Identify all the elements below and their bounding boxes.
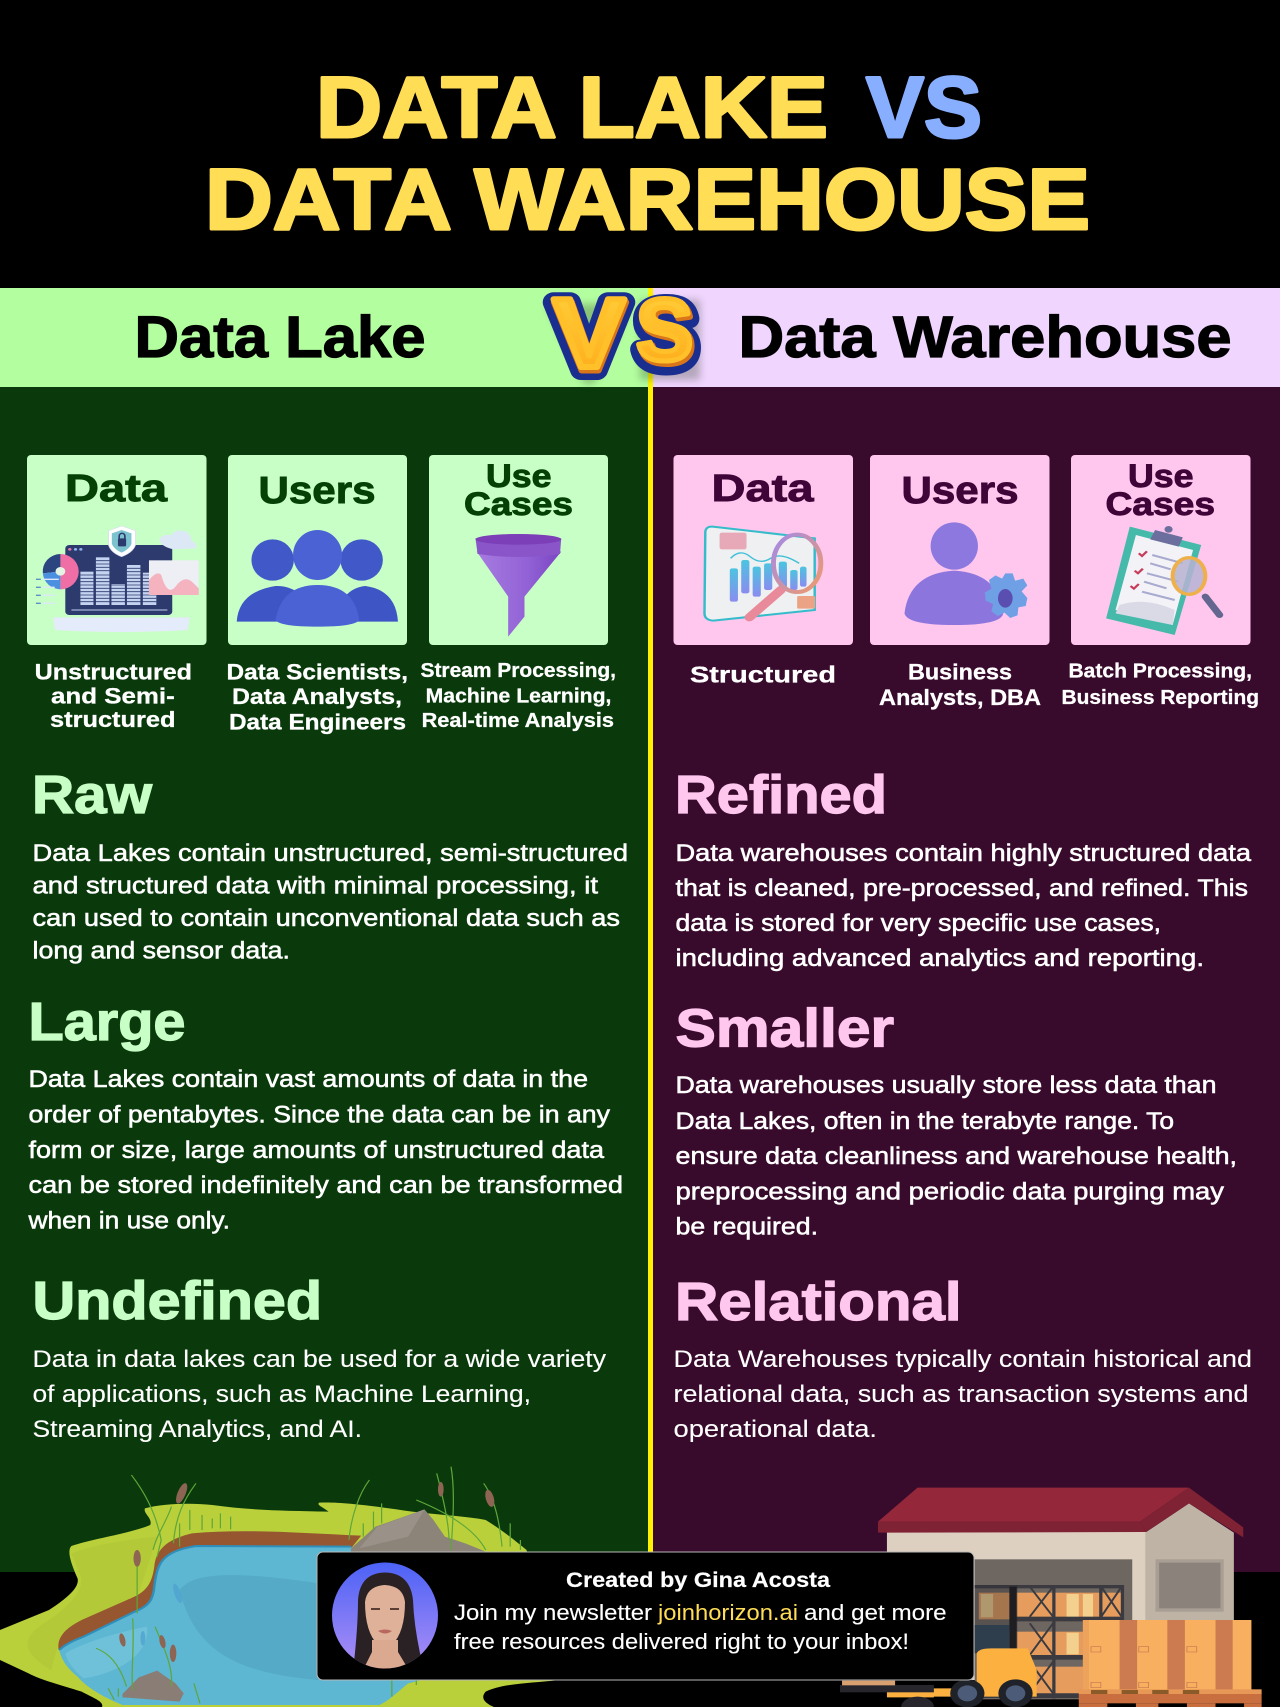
footer card: creator credit: [317, 1552, 974, 1680]
card: Use Cases: Cases: [1106, 486, 1215, 522]
title: DATA WAREHOUSE: [205, 152, 1090, 248]
icon: chart under magnifier: [704, 527, 821, 621]
title: VS: [866, 60, 982, 156]
section: Raw: long and sensor data.: [32, 938, 290, 965]
section: Large: Data Lakes contain vast amounts of data in the: [28, 1066, 588, 1093]
section: Refined: data is stored for very specific use cases,: [676, 910, 1161, 937]
card: Users: [870, 455, 1050, 645]
card: Use Cases: [1071, 455, 1250, 645]
heading band: Data Warehouse: [653, 288, 1280, 387]
card: Data: Data: [65, 468, 168, 510]
section: Large: [27, 992, 623, 1234]
caption: Use Cases: Stream Processing,: [420, 660, 616, 682]
card: Data: Data: [712, 468, 815, 510]
caption: Data: and Semi-: [51, 684, 175, 708]
section: Undefined: [32, 1271, 606, 1443]
heading band: Data Warehouse: Data Warehouse: [738, 305, 1232, 370]
section: Undefined: Data in data lakes can be used for a wide variety: [32, 1346, 606, 1373]
caption: Use Cases: Batch Processing,: [1068, 660, 1252, 682]
section: Smaller: Data warehouses usually store less data than: [676, 1072, 1216, 1099]
section: Refined: [675, 765, 1252, 972]
footer card: creator credit: Join my newsletter: [454, 1600, 652, 1625]
icon: data dashboard: [36, 526, 199, 632]
section: Large: can be stored indefinitely and can be transformed: [28, 1172, 623, 1199]
section: Smaller: Smaller: [676, 998, 894, 1058]
icon: clipboard with magnifier: [1106, 526, 1220, 635]
icon: funnel: [476, 534, 561, 637]
caption: Users: Data Analysts,: [232, 684, 402, 709]
caption: Users: Data Scientists,: [226, 660, 408, 684]
heading band: Data Lake: Data Lake: [134, 305, 426, 370]
icon: admin user with gear: [904, 522, 1027, 625]
title: [205, 60, 1090, 248]
section: Refined: that is cleaned, pre-processed, and refined. This: [676, 875, 1248, 902]
center divider: [648, 288, 653, 1558]
caption: Use Cases: Real-time Analysis: [422, 710, 614, 732]
caption: Data: structured: [50, 707, 176, 732]
caption: Users: [226, 660, 408, 734]
portrait: [332, 1562, 438, 1672]
card captions: [35, 660, 616, 734]
card captions: [690, 660, 1259, 710]
section: Smaller: [676, 998, 1237, 1240]
section: Smaller: preprocessing and periodic data purging may: [676, 1178, 1224, 1206]
card: Use Cases: [429, 455, 608, 645]
logo: VS badge: S: [636, 280, 693, 379]
logo: VS badge: V: [554, 281, 626, 391]
logo: VS badge: V: [553, 281, 625, 391]
card: Users: Users: [902, 470, 1018, 512]
caption: Users: Analysts, DBA: [879, 685, 1041, 710]
section: Raw: [32, 765, 628, 965]
title: DATA LAKE: [316, 60, 828, 156]
section: Refined: Data warehouses contain highly structured data: [676, 840, 1252, 867]
caption: Users: Business: [908, 660, 1012, 684]
section: Relational: relational data, such as transaction systems and: [674, 1381, 1248, 1408]
section: Large: when in use only.: [27, 1208, 230, 1234]
caption: Use Cases: Business Reporting: [1062, 687, 1259, 709]
section: Undefined: Streaming Analytics, and AI.: [32, 1416, 362, 1443]
caption: Data: [35, 660, 192, 732]
section: Large: Large: [28, 992, 186, 1052]
section: Relational: operational data.: [674, 1416, 877, 1443]
section: Refined: including advanced analytics and reporting.: [676, 945, 1204, 972]
card: Use Cases: Use: [486, 458, 552, 494]
section: Raw: Raw: [32, 765, 153, 825]
logo: VS badge: [546, 278, 700, 391]
section: Raw: Data Lakes contain unstructured, semi-structured: [32, 840, 628, 867]
footer card: creator credit: free resources delivered right to your inbox!: [454, 1629, 909, 1654]
footer card: creator credit: and get more: [804, 1600, 947, 1625]
illustration: warehouse with forklift: [840, 1488, 1262, 1707]
section: Raw: can used to contain unconventional data such as: [32, 905, 620, 932]
card: Data: [27, 455, 206, 645]
caption: Users: [879, 660, 1041, 710]
section: Undefined: Undefined: [32, 1271, 322, 1331]
section: Smaller: be required.: [676, 1214, 818, 1240]
card: Users: Users: [258, 470, 376, 512]
section: Relational: Relational: [675, 1272, 962, 1332]
footer card: creator credit: joinhorizon.ai: [657, 1600, 798, 1625]
icon: group of users: [237, 530, 398, 627]
caption: Use Cases: [1062, 660, 1259, 709]
section: Large: order of pentabytes. Since the data can be in any: [28, 1102, 610, 1128]
caption: Data: Unstructured: [35, 660, 192, 684]
card: Use Cases: Use: [1128, 458, 1194, 494]
panel: Data Warehouse: [653, 288, 1280, 1707]
card: Users: [228, 455, 407, 645]
caption: Data: Structured: [690, 662, 836, 688]
section: Smaller: ensure data cleanliness and warehouse health,: [676, 1143, 1237, 1170]
section: Smaller: Data Lakes, often in the terabyte range. To: [676, 1108, 1174, 1135]
section: Raw: and structured data with minimal processing, it: [32, 872, 598, 900]
caption: Use Cases: [420, 660, 616, 732]
logo: VS badge: S: [638, 283, 695, 382]
card: Use Cases: Cases: [464, 486, 573, 522]
section: Relational: [674, 1272, 1252, 1443]
section: Large: form or size, large amounts of unstructured data: [28, 1137, 605, 1164]
section: Refined: Refined: [675, 765, 887, 825]
caption: Use Cases: Machine Learning,: [426, 686, 611, 708]
caption: Users: Data Engineers: [229, 710, 406, 734]
footer card: creator credit: Created by Gina Acosta: [566, 1568, 831, 1592]
section: Undefined: of applications, such as Machine Learning,: [32, 1381, 531, 1408]
logo: VS badge: S: [637, 285, 695, 384]
heading band: Data Lake: [0, 288, 648, 387]
card: Data: [674, 455, 853, 645]
panel: Data Lake: [0, 288, 648, 1707]
illustration: lake: [0, 1467, 559, 1707]
logo: VS badge: V: [553, 278, 625, 388]
section: Relational: Data Warehouses typically contain historical and: [674, 1346, 1252, 1373]
